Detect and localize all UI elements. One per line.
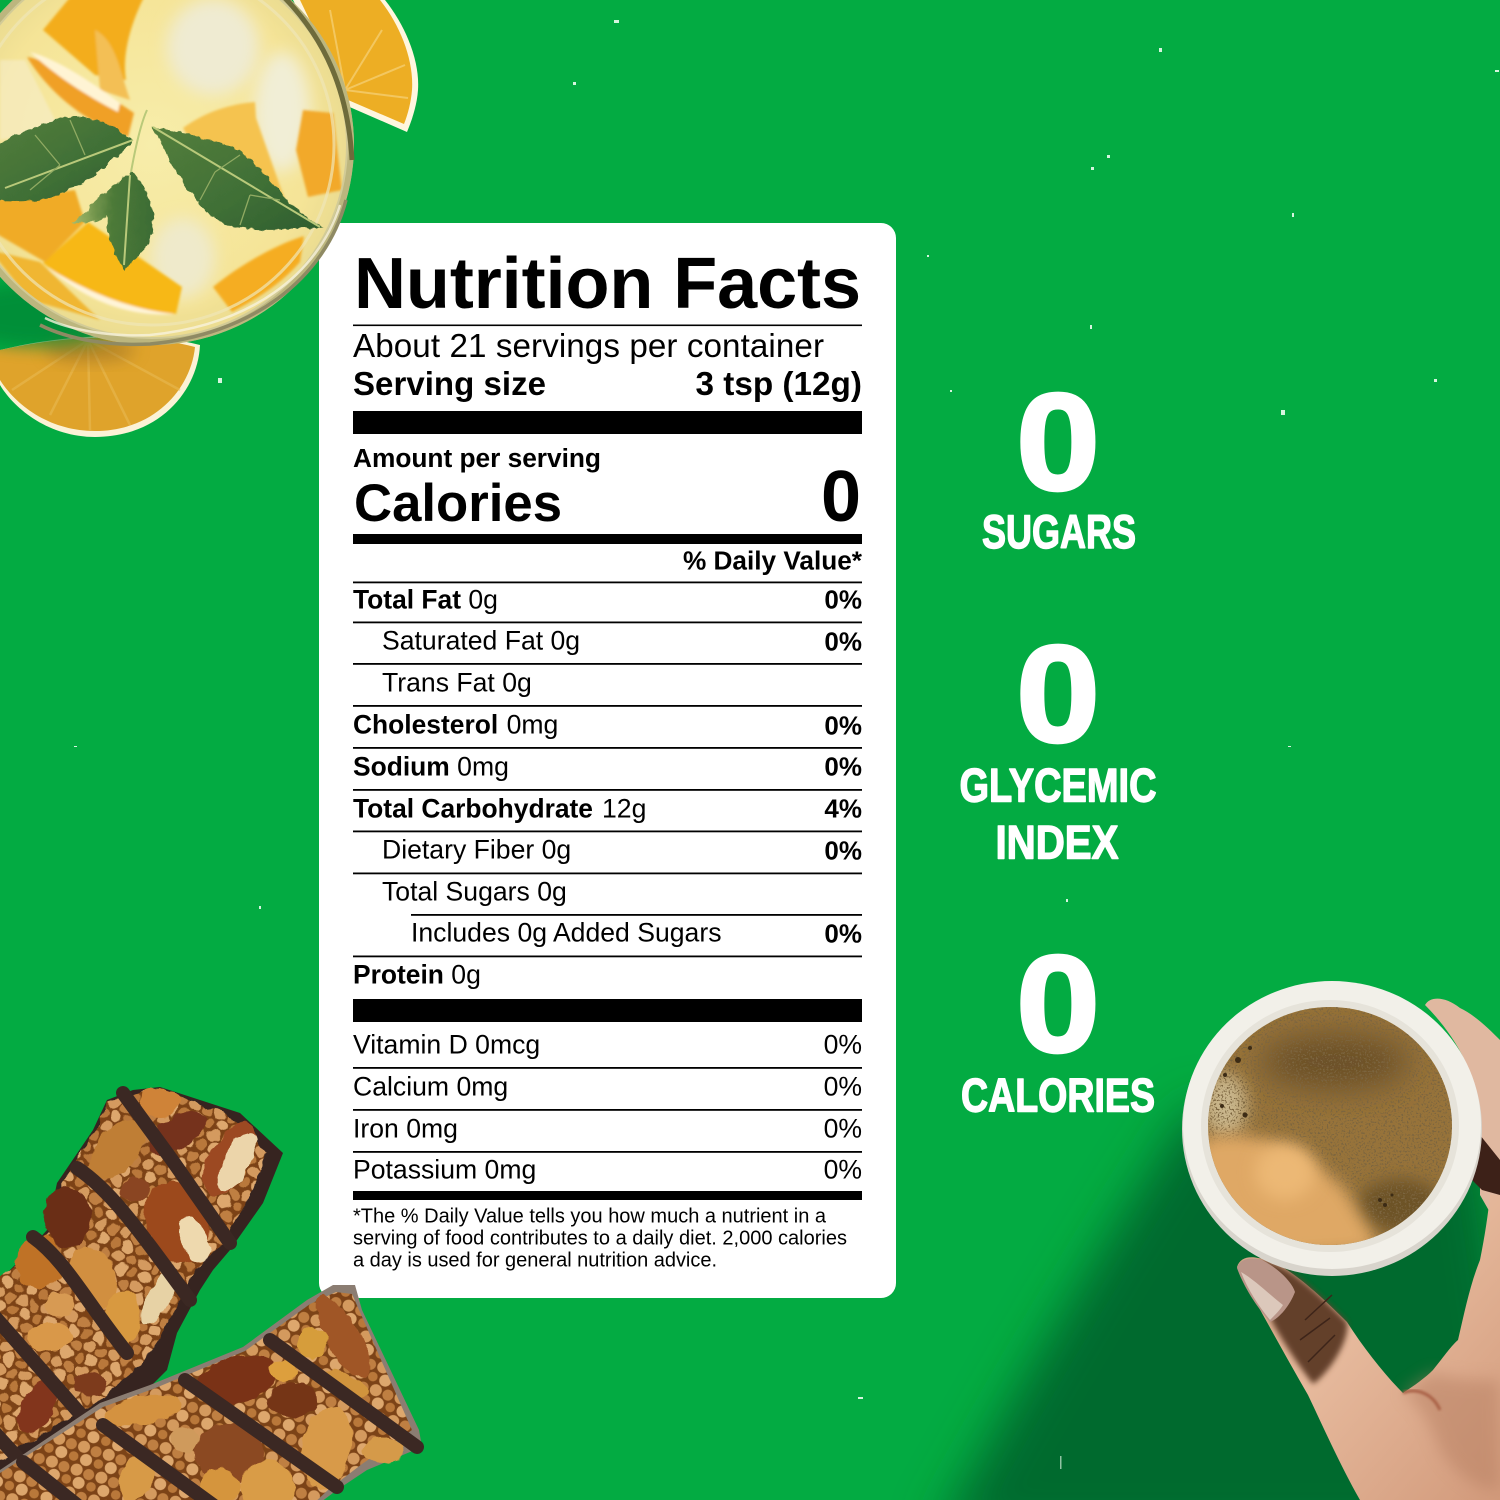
nutrient rows: Cholesterol 0mg xyxy=(353,710,558,740)
stat: 0 sugars: SUGARS xyxy=(982,505,1136,558)
stat: 0 calories: CALORIES xyxy=(961,1068,1155,1122)
stat: 0 sugars: 0 xyxy=(1016,366,1100,520)
image: lemonade glass xyxy=(0,0,354,345)
calories row xyxy=(354,457,861,537)
image: chocolate nut bar, left xyxy=(0,1087,283,1470)
image: hand holding cup xyxy=(1237,999,1500,1500)
chocolate stripes xyxy=(0,1093,230,1457)
serving size row: 3 tsp (12g) xyxy=(695,366,862,403)
nutrient rows: 0% xyxy=(824,626,862,656)
vitamin and mineral rows: 0% xyxy=(824,1072,862,1102)
medium divider xyxy=(353,534,862,544)
nutrient rows: Includes 0g Added Sugars xyxy=(411,918,722,948)
chocolate stripes xyxy=(23,1340,417,1500)
servings per container: About 21 servings per container xyxy=(353,328,824,365)
vitamin and mineral rows: 0% xyxy=(824,1030,862,1060)
vitamin and mineral rows: Vitamin D 0mcg xyxy=(353,1030,540,1060)
amount per serving: Amount per serving xyxy=(353,443,601,473)
footnote: *The % Daily Value tells you how much a nutrient in a xyxy=(353,1206,827,1228)
panel: nutrition facts label xyxy=(319,223,896,1298)
header rule xyxy=(353,324,862,326)
image: lemon slice below glass xyxy=(0,336,200,437)
stat: 0 sugars xyxy=(982,366,1136,558)
vitamin and mineral rows: 0% xyxy=(824,1114,862,1144)
stat: 0 glycemic index: GLYCEMIC xyxy=(960,758,1156,812)
nutrient rows: 0% xyxy=(824,752,862,782)
footnote: serving of food contributes to a daily diet. 2,000 calories xyxy=(353,1228,847,1250)
coffee cup and hand shadow xyxy=(935,1110,1500,1500)
glass rim highlights xyxy=(0,0,352,344)
nutrient rows: 0% xyxy=(824,584,862,614)
daily value heading: % Daily Value* xyxy=(683,546,863,576)
nutrient rows: 4% xyxy=(824,794,862,824)
serving size row xyxy=(353,365,862,403)
vitamin and mineral rows: Potassium 0mg xyxy=(353,1154,536,1184)
stat: 0 calories: 0 xyxy=(1016,928,1100,1082)
vitamin and mineral rows: Calcium 0mg xyxy=(353,1072,508,1102)
stat: 0 glycemic index: INDEX xyxy=(996,816,1118,868)
nutrient rows: 0% xyxy=(824,918,862,948)
nutrient rows: Trans Fat 0g xyxy=(382,668,532,698)
medium divider xyxy=(353,1191,862,1200)
stat: 0 glycemic index xyxy=(960,618,1156,868)
nutrient rows: Protein 0g xyxy=(353,960,481,990)
stat: 0 calories xyxy=(961,928,1155,1122)
thumb shaded knuckle xyxy=(1260,1260,1347,1384)
image: glass shadow xyxy=(0,283,130,347)
vitamin and mineral rows: 0% xyxy=(824,1154,862,1184)
image: lemon wedge top right xyxy=(293,0,418,132)
nutrient rows xyxy=(353,582,862,990)
nutrient rows: Total Sugars 0g xyxy=(382,876,567,906)
image: coffee cup xyxy=(1182,981,1482,1276)
orange slices xyxy=(0,0,342,320)
coffee crema xyxy=(1208,1007,1452,1245)
image: chocolate nut bar, right xyxy=(0,1285,422,1500)
nutrient rows: 0% xyxy=(824,710,862,740)
nutrient rows: Sodium 0mg xyxy=(353,752,509,782)
heading: Nutrition Facts: Nutrition Facts xyxy=(354,244,861,324)
footnote: a day is used for general nutrition advice. xyxy=(353,1250,717,1272)
ice cubes xyxy=(151,0,310,298)
nuts xyxy=(8,1087,266,1441)
calories row: 0 xyxy=(821,457,861,537)
footnote xyxy=(353,1206,847,1272)
thumbnail xyxy=(1237,1259,1295,1322)
mint leaves xyxy=(0,110,323,270)
palm and thumb xyxy=(1237,1195,1500,1500)
label background xyxy=(319,223,896,1298)
calories row: Calories xyxy=(354,474,562,533)
thick divider xyxy=(353,411,862,434)
vitamin and mineral rows: Iron 0mg xyxy=(353,1114,458,1144)
vitamin and mineral rows xyxy=(353,1030,862,1184)
nutrient rows: Total Fat 0g xyxy=(353,584,498,614)
nutrient rows: 0% xyxy=(824,836,862,866)
serving size row: Serving size xyxy=(353,365,546,402)
nutrient rows: Total Carbohydrate 12g xyxy=(353,794,646,824)
nutrient rows: Dietary Fiber 0g xyxy=(382,834,571,864)
thick divider xyxy=(353,999,862,1022)
fingers behind the cup xyxy=(1425,999,1500,1230)
stat: 0 glycemic index: 0 xyxy=(1016,618,1100,772)
nutrient rows: Saturated Fat 0g xyxy=(382,626,580,656)
nuts xyxy=(103,1289,403,1500)
